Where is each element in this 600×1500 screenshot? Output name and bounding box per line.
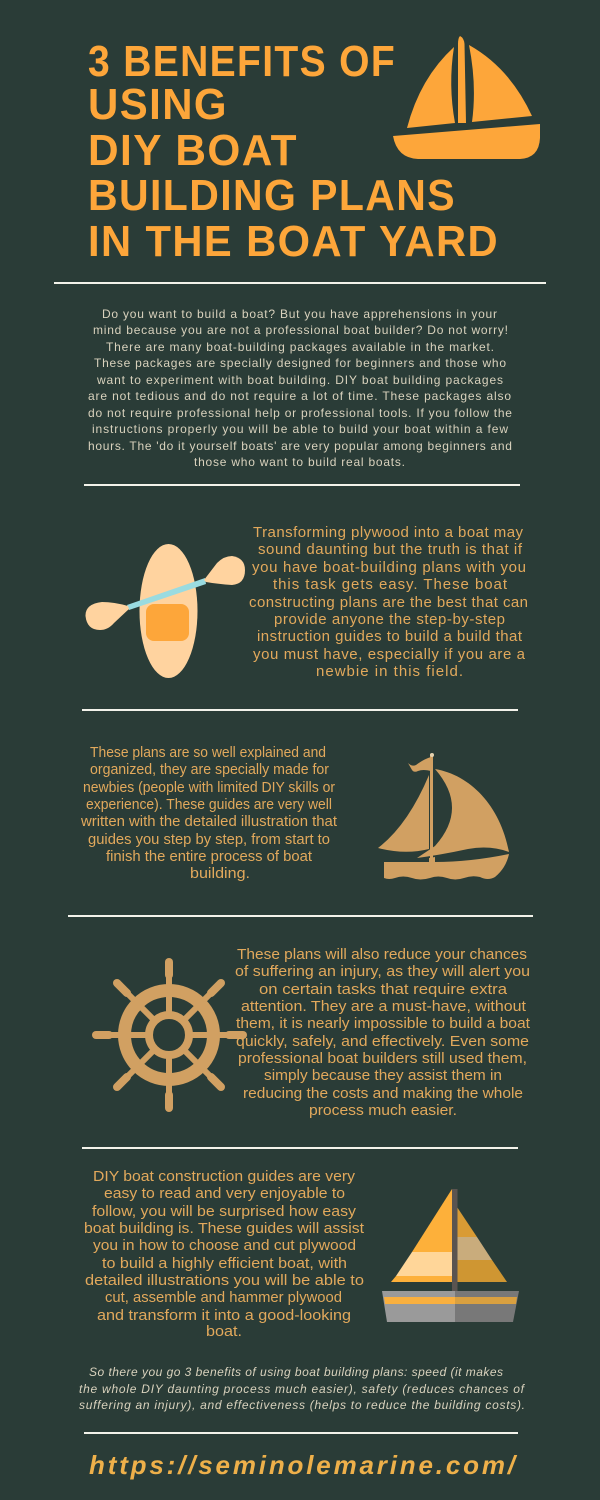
text block: step two: newbies (people with limited DIY skills or xyxy=(83,780,335,796)
text block: step one xyxy=(249,524,528,680)
divider xyxy=(68,915,533,917)
title: BUILDING PLANS xyxy=(88,171,456,220)
closing paragraph: suffering an injury), and effectiveness (helps to reduce the building costs). xyxy=(79,1398,525,1412)
text block: step four: boat building is. These guides will assist xyxy=(84,1220,365,1237)
text block: step four: cut, assemble and hammer plywood xyxy=(105,1289,342,1306)
title: USING xyxy=(88,80,228,129)
text block: step three xyxy=(235,946,531,1119)
text block: step two: building. xyxy=(190,866,250,882)
text block: step four: detailed illustrations you will be able to xyxy=(85,1272,364,1289)
divider xyxy=(82,1147,518,1149)
text block: step two: written with the detailed illustration that xyxy=(80,814,337,830)
text block: step one: this task gets easy. These boat xyxy=(273,576,508,593)
intro paragraph: those who want to build real boats. xyxy=(194,455,405,469)
intro paragraph: These packages are specially designed for beginners and those who xyxy=(94,356,506,370)
text block: step two: organized, they are specially made for xyxy=(90,762,329,778)
text block: step one: instruction guides to build a build that xyxy=(257,628,523,645)
intro paragraph: Do you want to build a boat? But you have apprehensions in your xyxy=(102,307,497,321)
icon: striped sailboat xyxy=(382,1189,519,1322)
title xyxy=(88,37,499,266)
closing paragraph: the whole DIY daunting process much easier), safety (reduces chances of xyxy=(79,1382,526,1396)
title: 3 BENEFITS OF xyxy=(88,37,396,86)
title: IN THE BOAT YARD xyxy=(88,217,499,266)
intro paragraph: want to experiment with boat building. DIY boat building packages xyxy=(96,373,503,387)
text block: step four: easy to read and very enjoyable to xyxy=(104,1185,345,1202)
text block: step three: on certain tasks that require extra xyxy=(259,981,508,998)
divider xyxy=(84,1432,518,1434)
text block: step two: guides you step by step, from start to xyxy=(88,832,330,848)
text block: step three: them, it is nearly impossible to build a boat xyxy=(236,1015,531,1032)
text block: step four: boat. xyxy=(206,1323,242,1340)
text block: step two: finish the entire process of boat xyxy=(106,849,312,865)
text block: step one: Transforming plywood into a boat may xyxy=(253,524,524,541)
text block: step three: attention. They are a must-have, without xyxy=(241,998,527,1015)
text block: step one: you have boat-building plans with you xyxy=(252,559,526,576)
text block: step four: follow, you will be surprised how easy xyxy=(92,1203,357,1220)
text block: step four: to build a highly efficient boat, with xyxy=(102,1255,347,1272)
text block: step three: of suffering an injury, as they will alert you xyxy=(235,963,530,980)
text block: step three: process much easier. xyxy=(309,1102,457,1119)
closing paragraph xyxy=(79,1365,526,1412)
icon: kayak with paddle xyxy=(85,544,245,678)
icon: orange sailboat xyxy=(393,36,540,159)
divider xyxy=(84,484,520,486)
text block: step three: reducing the costs and making the whole xyxy=(243,1085,523,1102)
closing paragraph: So there you go 3 benefits of using boat building plans: speed (it makes xyxy=(89,1365,503,1379)
text block: step one: constructing plans are the best that can xyxy=(249,594,528,611)
text block: step one: newbie in this field. xyxy=(316,663,463,680)
text block: step two xyxy=(80,745,337,882)
website url: https://seminolemarine.com/ xyxy=(89,1450,518,1480)
intro paragraph: There are many boat-building packages available in the market. xyxy=(106,340,494,354)
icon: tan sailboat with flag xyxy=(378,753,509,880)
intro paragraph: hours. The 'do it yourself boats' are very popular among beginners and xyxy=(88,439,512,453)
intro paragraph: mind because you are not a professional boat builder? Do not worry! xyxy=(93,323,508,337)
divider xyxy=(54,282,546,284)
divider xyxy=(82,709,518,711)
intro paragraph: are not tedious and do not require a lot of time. These packages also xyxy=(88,389,511,403)
intro paragraph: instructions properly you will be able to build your boat within a few xyxy=(92,422,508,436)
text block: step three: professional boat builders still used them, xyxy=(238,1050,527,1067)
text block: step two: These plans are so well explained and xyxy=(90,745,326,761)
intro paragraph xyxy=(88,307,512,469)
text block: step one: you must have, especially if you are a xyxy=(253,646,526,663)
text block: step two: experience). These guides are very well xyxy=(86,797,332,813)
text block: step one: sound daunting but the truth is that if xyxy=(258,541,523,558)
title: DIY BOAT xyxy=(88,126,298,175)
text block: step one: provide anyone the step-by-step xyxy=(274,611,505,628)
text block: step four xyxy=(84,1168,365,1340)
text block: step three: quickly, safely, and effectively. Even some xyxy=(236,1033,529,1050)
text block: step four: you in how to choose and cut plywood xyxy=(93,1237,356,1254)
intro paragraph: do not require professional help or professional tools. If you follow the xyxy=(88,406,512,420)
text block: step four: DIY boat construction guides are very xyxy=(93,1168,356,1185)
icon: ship wheel xyxy=(96,962,243,1108)
text block: step three: simply because they assist them in xyxy=(264,1067,502,1084)
text block: step four: and transform it into a good-looking xyxy=(97,1307,351,1324)
text block: step three: These plans will also reduce your chances xyxy=(237,946,527,963)
